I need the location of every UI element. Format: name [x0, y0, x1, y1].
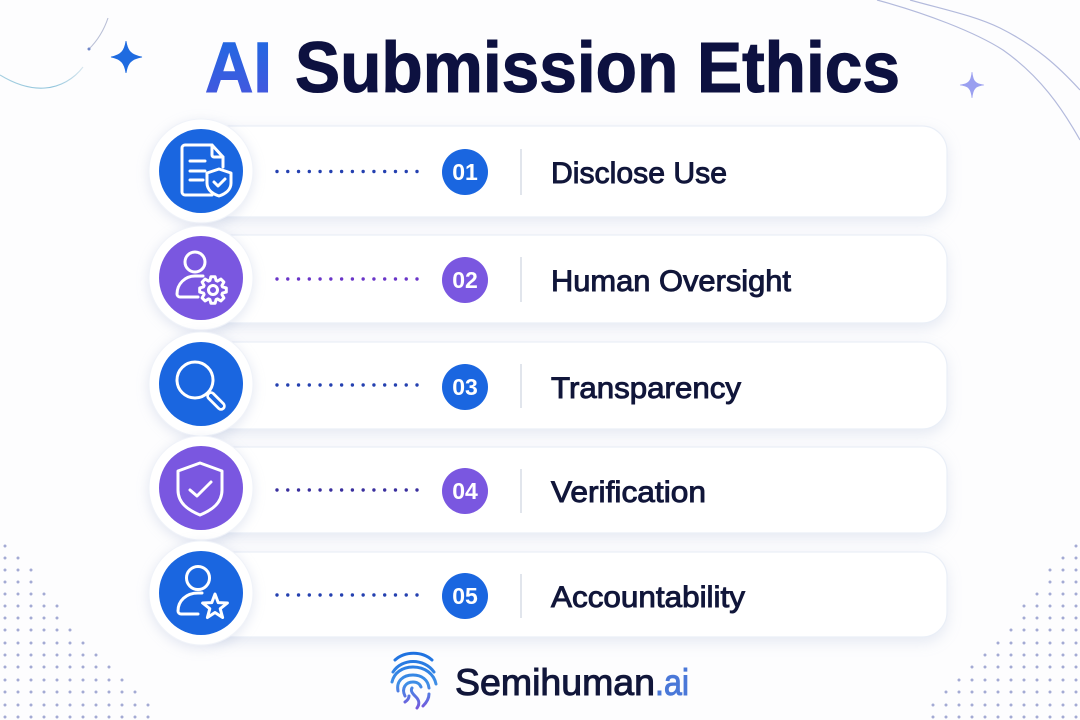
panel: row 4 Verification: Verification [551, 476, 706, 509]
logo: Semihuman.ai [392, 653, 689, 708]
icon: magnifying glass [177, 362, 221, 406]
icon: person with gear [177, 252, 226, 303]
panel: row 3 Transparency [149, 332, 947, 436]
title: Submission Ethics [295, 29, 900, 108]
panel: row 1 Disclose Use: Disclose Use [551, 157, 727, 190]
decorative curve: top left [0, 18, 108, 88]
panel: row 2 Human Oversight: 02 [452, 267, 478, 293]
icon: fingerprint [392, 653, 436, 708]
panel: row 2 Human Oversight: Human Oversight [551, 265, 792, 298]
panel: row 1 Disclose Use: 01 [452, 159, 478, 185]
panel: row 4 Verification: 04 [452, 478, 478, 504]
panel: row 5 Accountability [149, 541, 947, 645]
logo: Semihuman.ai: .ai [655, 662, 689, 703]
decorative curves: top right [877, 0, 1080, 140]
panel: row 1 Disclose Use [149, 119, 947, 223]
title: AI [205, 29, 272, 108]
icon: lilac sparkle [960, 72, 984, 98]
panel: row 3 Transparency: Transparency [551, 372, 741, 405]
panel: row 5 Accountability: Accountability [551, 581, 745, 614]
icon: blue sparkle [111, 41, 142, 73]
logo: Semihuman.ai: Semihuman [455, 662, 655, 703]
panel: row 3 Transparency: 03 [452, 374, 478, 400]
icon: person with star [178, 566, 227, 618]
panel: row 2 Human Oversight [149, 226, 947, 330]
icon: document with shield [182, 145, 231, 196]
dot pattern: bottom right [932, 546, 1076, 717]
icon: shield with check [178, 463, 222, 515]
panel: row 4 Verification [149, 436, 947, 540]
panel: row 5 Accountability: 05 [452, 583, 478, 609]
dot pattern: bottom left [5, 546, 149, 717]
